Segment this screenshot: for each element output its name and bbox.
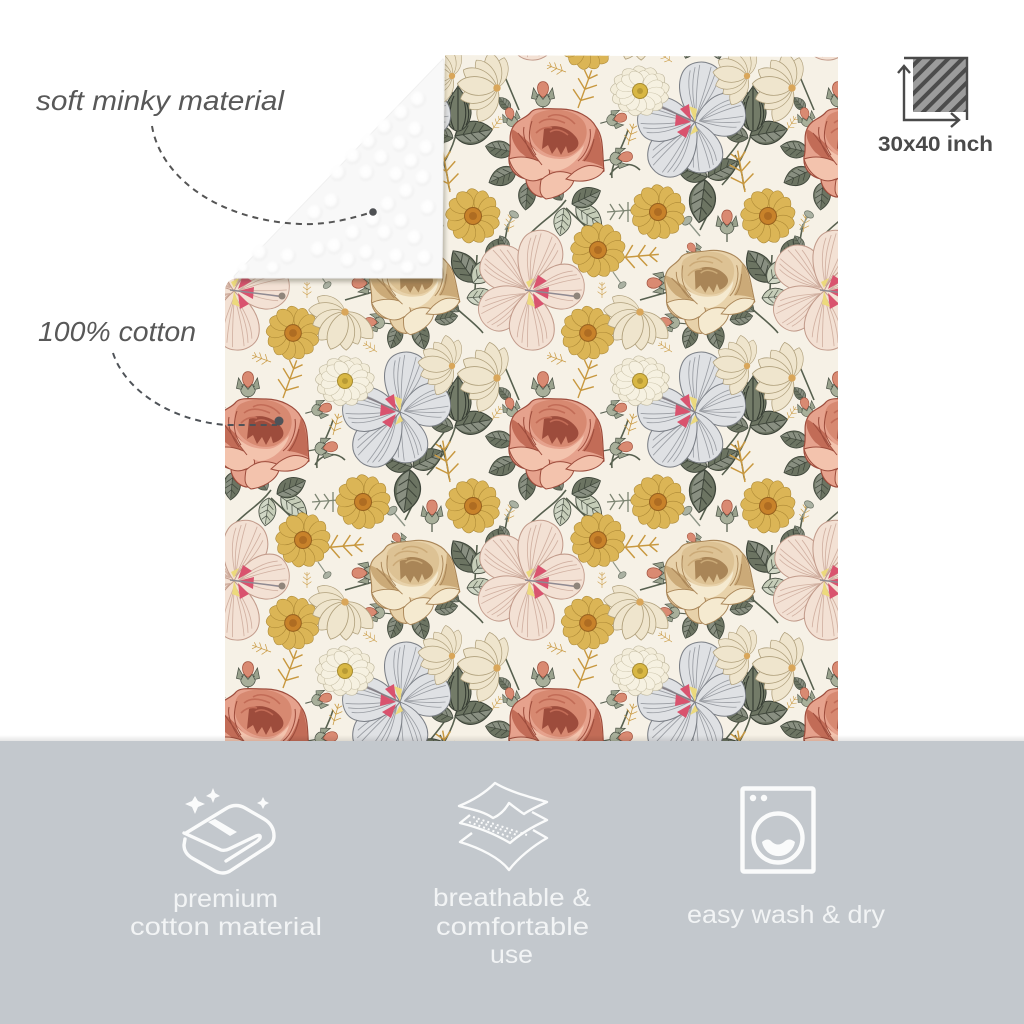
folded corner: white minky fabric [234, 59, 444, 278]
size icon: 30x40 inch [878, 58, 993, 156]
icon: washing machine [742, 788, 814, 872]
label: premium cotton material [130, 885, 322, 941]
label: breathable & comfortable use: use [490, 941, 533, 969]
icon: folded towel with sparkles [184, 788, 274, 873]
callout: soft minky material: soft minky material [36, 85, 285, 116]
callout: 100% cotton [38, 316, 284, 426]
size icon: 30x40 inch: 30x40 inch [878, 132, 993, 156]
callout: soft minky material [36, 85, 377, 224]
icon: breathable fabric layers [459, 783, 547, 870]
label: breathable & comfortable use [433, 884, 591, 969]
label: breathable & comfortable use: breathable & [433, 884, 591, 912]
bottom feature panel [0, 735, 1024, 1024]
callout: 100% cotton: 100% cotton [38, 316, 196, 347]
hatched square [913, 58, 967, 112]
label: premium cotton material: premium [173, 885, 278, 913]
label: easy wash & dry: easy wash & dry [687, 901, 886, 929]
blanket with floral pattern [225, 55, 838, 741]
label: premium cotton material: cotton material [130, 913, 322, 941]
label: breathable & comfortable use: comfortable [436, 913, 589, 941]
